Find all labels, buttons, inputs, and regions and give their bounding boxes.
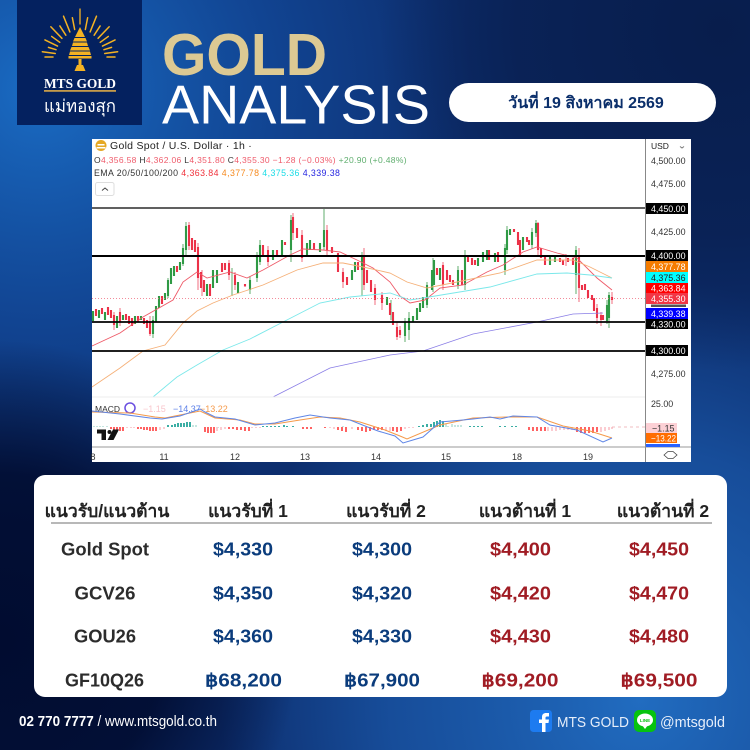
chart header legend: Gold Spot / U.S. Dollar · 1h · (110, 140, 252, 152)
icon: golden pagoda with rays (42, 9, 118, 71)
logo Thai name: แม่ทองสุก (44, 96, 116, 117)
current price dotted line (92, 298, 645, 300)
time axis: 15 (441, 452, 451, 462)
price axis: 4,475.00 (651, 179, 686, 189)
table header row (45, 498, 709, 521)
table row: GOU26: $4,480 (629, 626, 689, 646)
table header row: แนวรับ/แนวต้าน (45, 501, 169, 521)
MACD signal line (92, 411, 612, 439)
time axis: 11 (159, 452, 169, 462)
candlestick bodies: red (96, 217, 612, 337)
price axis: 4,500.00 (651, 156, 686, 166)
price axis: 4,450.00 (651, 204, 686, 214)
table row: GCV26 (74, 584, 689, 604)
EMA 100 line (153, 273, 612, 397)
Facebook name: MTS GOLD (557, 714, 629, 731)
time axis: 8 (90, 452, 96, 462)
table row: Gold Spot: $4,300 (352, 540, 412, 560)
time axis: 18 (512, 452, 522, 462)
date pill (449, 83, 716, 122)
MACD indicator: −14.37 (173, 404, 201, 414)
table row: Gold Spot (61, 540, 689, 560)
table row: GOU26: $4,360 (213, 626, 273, 646)
time axis: 13 (300, 452, 310, 462)
title: ANALYSIS: ANALYSIS (162, 74, 430, 136)
table header row: แนวต้านที่ 2 (617, 498, 709, 521)
table row: GF10Q26: ฿69,500 (620, 670, 698, 690)
time axis (90, 452, 677, 462)
price axis: 4,375.36 (651, 273, 686, 283)
table row: GF10Q26 (65, 670, 698, 690)
price axis: −1.15 (652, 424, 675, 434)
icon: TradingView logo (97, 430, 119, 440)
logo: MTS Gold (17, 0, 142, 125)
price axis: 4,300.00 (651, 346, 686, 356)
title: GOLD: GOLD (162, 22, 327, 88)
price axis: 4,425.00 (651, 227, 686, 237)
table header row: แนวรับที่ 2 (346, 498, 426, 521)
table row: GF10Q26: ฿67,900 (344, 670, 420, 690)
table row: GCV26: $4,350 (213, 584, 273, 604)
support and resistance lines (92, 208, 646, 351)
icon: Facebook (530, 710, 552, 732)
panel: support and resistance table (34, 475, 727, 697)
MACD indicator: −1.15 (143, 404, 166, 414)
EMA 50 line (92, 260, 612, 387)
candlestick wicks (114, 209, 612, 342)
chart header legend: EMA 20/50/100/200 4,363.84 4,377.78 4,375.36 4,339.38 (94, 168, 340, 178)
icon: LINE (634, 710, 656, 732)
date pill: วันที่ 19 สิงหาคม 2569 (508, 91, 664, 112)
MACD line (92, 409, 612, 443)
panel: gold price chart (90, 139, 691, 462)
table row: GOU26 (74, 626, 689, 646)
table row: GCV26: $4,420 (490, 584, 551, 604)
table header row: แนวรับที่ 1 (208, 498, 288, 521)
table row: GOU26: GOU26 (74, 626, 136, 646)
MACD indicator: −13.22 (200, 404, 228, 414)
price axis: 4,363.84 (651, 284, 686, 294)
time axis: 12 (230, 452, 240, 462)
table row: GCV26: $4,320 (352, 584, 412, 604)
table row: Gold Spot: $4,450 (629, 540, 689, 560)
time axis: 14 (371, 452, 381, 462)
price axis: 4,339.38 (651, 309, 686, 319)
candlestick bodies: green (93, 220, 609, 336)
table row: GCV26: GCV26 (74, 584, 136, 604)
MACD indicator: MACD (95, 404, 120, 414)
footer contact: 02 770 7777 / www.mtsgold.co.th (19, 714, 217, 730)
price axis: −13.22 (651, 434, 676, 444)
table row: GF10Q26: ฿68,200 (205, 670, 282, 690)
price axis (92, 139, 691, 462)
LINE handle: @mtsgold (660, 714, 725, 731)
time axis: 19 (583, 452, 593, 462)
table row: GF10Q26: GF10Q26 (65, 670, 144, 690)
chart header legend: O4,356.58 H4,362.06 L4,351.80 C4,355.30 −1.28 (−0.03%) +20.90 (+0.48%) (94, 155, 407, 165)
table row: Gold Spot: $4,400 (490, 540, 551, 560)
MACD indicator (92, 403, 645, 443)
price axis: 4,330.00 (651, 320, 686, 330)
MACD histogram (94, 420, 645, 433)
logo wordmark: MTS GOLD (44, 76, 116, 91)
price axis: 4,355.30 (651, 294, 686, 304)
price axis: 4,400.00 (651, 251, 686, 261)
table row: Gold Spot: Gold Spot (61, 540, 149, 560)
price axis: 4,275.00 (651, 369, 686, 379)
table row: GOU26: $4,430 (490, 626, 551, 646)
table header row: แนวต้านที่ 1 (479, 498, 571, 521)
EMA 200 line (273, 313, 603, 397)
chart header legend (94, 140, 407, 196)
price axis: 4,377.78 (651, 262, 686, 272)
EMA 20 line (92, 247, 612, 346)
table row: GCV26: $4,470 (629, 584, 689, 604)
price axis: USD (651, 141, 669, 151)
table row: Gold Spot: $4,330 (213, 540, 273, 560)
price axis: 25.00 (651, 399, 673, 409)
table row: GF10Q26: ฿69,200 (482, 670, 558, 690)
table row: GOU26: $4,330 (352, 626, 412, 646)
icon: LINE: LINE (640, 718, 650, 723)
